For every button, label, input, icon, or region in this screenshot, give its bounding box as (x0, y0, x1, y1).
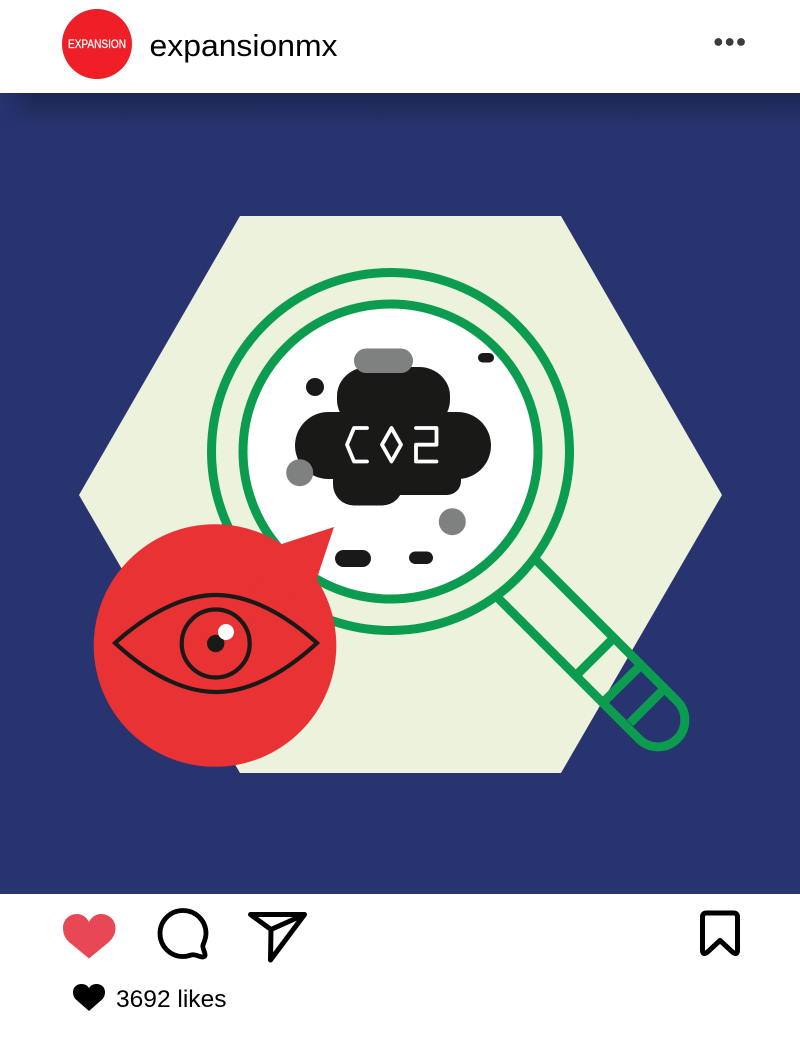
logo badge: EXPANSION (68, 39, 126, 51)
icon: magnifying glass (212, 272, 685, 747)
grey dot particle left (286, 459, 313, 486)
header bar (62, 9, 745, 79)
pupil (207, 635, 224, 652)
eye highlight (218, 624, 234, 640)
inner lens ring (243, 304, 538, 599)
panel: navy post background (0, 93, 800, 894)
hexagon backdrop (79, 216, 722, 773)
cloud shape (295, 367, 491, 506)
CO2 label (347, 428, 436, 462)
eye outline (115, 595, 317, 692)
black dot particle (306, 378, 324, 396)
icon: small black heart (73, 984, 105, 1011)
icon: more options dots (714, 38, 745, 46)
logo badge (62, 9, 132, 79)
icon: comment bubble (160, 910, 206, 957)
icon: send arrow (250, 914, 304, 960)
black pill particle bottom right (409, 552, 433, 564)
grey dot particle right (439, 508, 466, 535)
icon: red heart (63, 914, 116, 958)
icon: CO2 cloud with particles (286, 348, 494, 567)
black pill particle bottom left (335, 550, 371, 567)
outer lens ring (212, 272, 570, 630)
likes count: 3692 likes (116, 986, 226, 1013)
iris (182, 610, 250, 678)
account name: expansionmx (150, 28, 338, 63)
icon: eye (115, 595, 317, 692)
small black pill particle (478, 353, 494, 362)
grey pill particle (354, 348, 413, 373)
red speech bubble (94, 524, 336, 767)
icon: bookmark (702, 913, 738, 954)
speech bubble with eye (94, 524, 336, 767)
action bar (63, 910, 738, 1013)
magnifying glass handle (498, 560, 685, 747)
